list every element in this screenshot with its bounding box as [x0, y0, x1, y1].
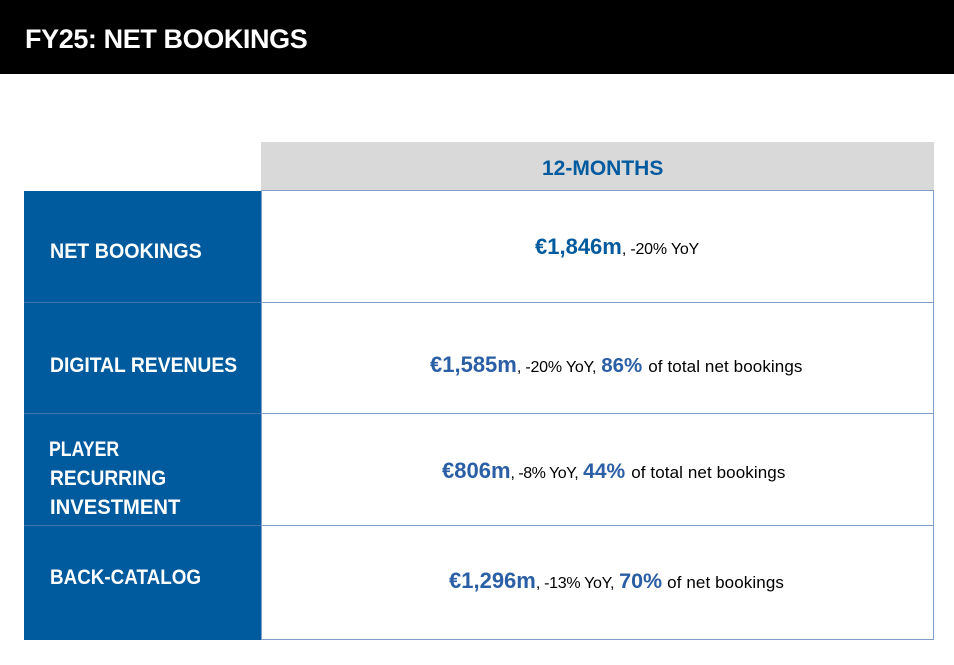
- label: player recurring investment: RECURRING: [50, 467, 166, 490]
- value: back-catalog: €1,296m, -13% YoY,70% of net bookings: [449, 568, 784, 593]
- row labels panel: [24, 191, 261, 640]
- title: FY25: NET BOOKINGS: [25, 24, 307, 54]
- column header: 12-MONTHS: [542, 157, 663, 180]
- label: net bookings: NET BOOKINGS: [50, 240, 202, 263]
- values panel: [261, 190, 934, 640]
- label: player recurring investment: [49, 438, 180, 519]
- label: back-catalog: BACK-CATALOG: [50, 566, 201, 589]
- value: digital revenues: €1,585m, -20% YoY,86% of total net bookings: [430, 352, 803, 377]
- column header: [261, 142, 934, 191]
- label: digital revenues: DIGITAL REVENUES: [50, 354, 237, 377]
- value: net bookings: €1,846m, -20% YoY: [535, 234, 699, 259]
- title bar: [0, 0, 954, 74]
- table: [24, 142, 934, 640]
- label: player recurring investment: PLAYER: [49, 438, 119, 461]
- label: player recurring investment: INVESTMENT: [50, 496, 180, 519]
- value: player recurring investment: €806m, -8% YoY,44% of total net bookings: [442, 458, 785, 483]
